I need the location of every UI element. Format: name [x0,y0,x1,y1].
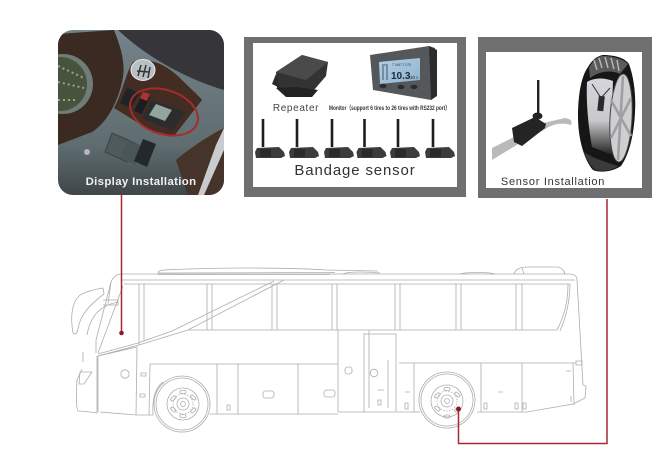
icon: wheel with sensor [578,55,635,172]
bus line drawing [72,267,586,432]
icon: repeater [272,55,328,97]
icon: monitor: T 1667 T 075 [392,63,411,67]
icon: monitor [370,46,437,100]
panel: display installation photo [58,30,224,195]
caption: Display Installation: Display Installation [86,176,196,188]
panel: product components [244,37,466,197]
connector: display to bus [119,195,124,335]
icon: monitor: 30 c [410,75,419,80]
icon: gear shift symbol [131,60,155,80]
front panel [98,347,137,415]
monitor label: Monitor（support 6 tires to 26 tires with RS232 port） [329,104,450,112]
body outline [108,274,586,412]
repeater label: Repeater [273,103,319,114]
rear wheel [419,372,475,428]
panel: sensor installation [478,37,652,198]
connector: sensor to rear wheel [456,199,607,444]
bandage sensor label: Bandage sensor [294,162,416,179]
caption: Sensor Installation: Sensor Installation [501,176,605,188]
icon: speedometer gauge [58,54,93,114]
icons: six bandage sensors [255,119,455,158]
front of bus [96,282,123,353]
icon: monitor: 10.3 [391,71,411,82]
door [338,330,396,412]
luggage bays [136,364,338,415]
red highlight ellipse [129,87,199,137]
windows [139,284,522,345]
icon: sensor on strap [492,80,571,160]
front wheel [154,376,210,432]
roof details [158,268,378,273]
